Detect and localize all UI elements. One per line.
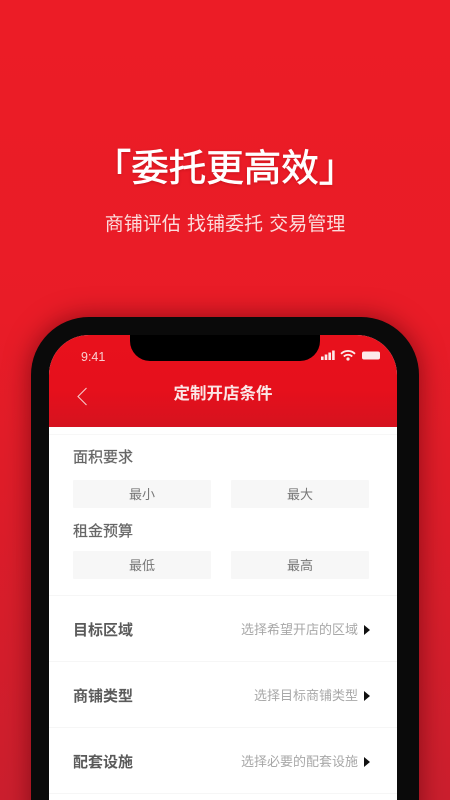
input: min rent bbox=[73, 551, 211, 579]
phone notch bbox=[130, 335, 320, 361]
row: shop type: 选择目标商铺类型 bbox=[254, 688, 358, 703]
subtitle: 商铺评估 找铺委托 交易管理 bbox=[105, 214, 345, 235]
input: min area bbox=[73, 480, 211, 508]
phone mockup bbox=[31, 317, 419, 800]
input: max rent bbox=[231, 551, 369, 579]
input: max area bbox=[231, 480, 369, 508]
row: shop type: 商铺类型 bbox=[73, 688, 133, 705]
input: min area: 最小 bbox=[129, 487, 155, 502]
row: facilities bbox=[73, 754, 370, 771]
app header bbox=[49, 335, 397, 427]
input: max area: 最大 bbox=[287, 487, 313, 502]
icon: status indicators bbox=[321, 350, 380, 361]
label: area: 面积要求 bbox=[73, 449, 133, 466]
input: max rent: 最高 bbox=[287, 558, 313, 573]
row: facilities: 选择必要的配套设施 bbox=[241, 754, 358, 769]
label: rent: 租金预算 bbox=[73, 523, 133, 540]
screen title: 定制开店条件 bbox=[174, 385, 272, 403]
form: area and rent bbox=[49, 427, 397, 596]
row: target area bbox=[73, 622, 370, 639]
status time: 9:41 bbox=[81, 350, 105, 364]
row: facilities: 配套设施 bbox=[73, 754, 133, 771]
row: shop type bbox=[73, 688, 370, 705]
input: min rent: 最低 bbox=[129, 558, 155, 573]
icon: back arrow bbox=[77, 388, 87, 406]
row: target area: 目标区域 bbox=[73, 622, 133, 639]
phone screen bbox=[49, 335, 397, 800]
row: target area: 选择希望开店的区域 bbox=[241, 622, 358, 637]
title: 「委托更高效」 bbox=[94, 147, 356, 189]
